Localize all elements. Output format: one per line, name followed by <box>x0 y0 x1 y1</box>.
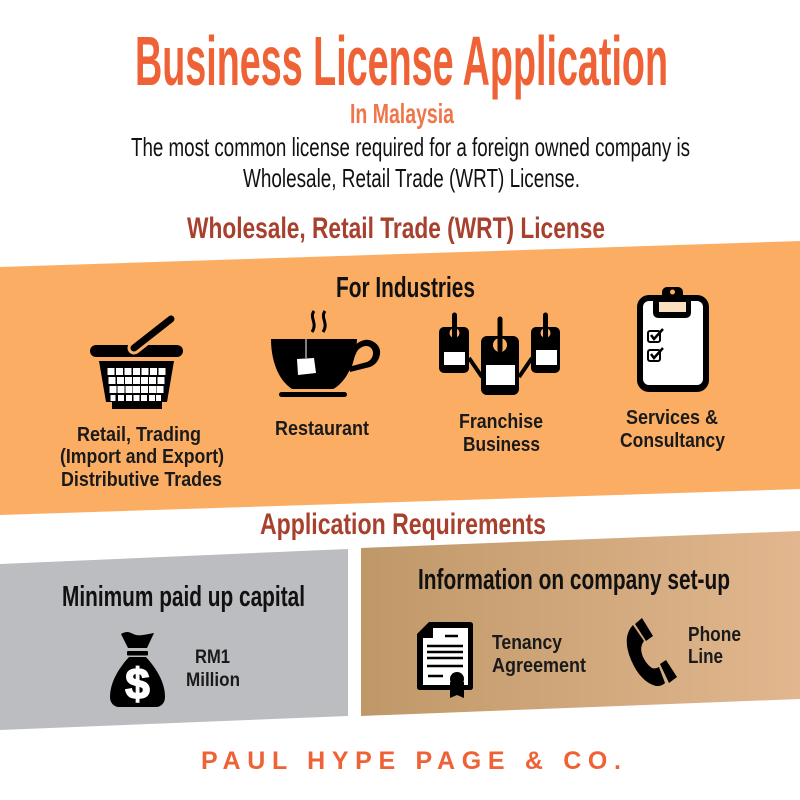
heading: minimum capital: Minimum paid up capital <box>62 581 305 613</box>
icon: shopping basket <box>90 319 183 409</box>
icon: clipboard <box>637 287 709 392</box>
icon: tea cup <box>271 311 380 397</box>
text: RM1 million <box>186 647 240 691</box>
icon: franchise tags <box>439 315 560 395</box>
intro text <box>131 132 690 193</box>
icon: tenancy document <box>417 622 473 698</box>
label: services <box>620 407 726 452</box>
label: retail: Retail, Trading <box>77 424 201 446</box>
panel: minimum capital <box>0 549 348 730</box>
label: services: Consultancy <box>620 430 726 452</box>
intro text: Wholesale, Retail Trade (WRT) License. <box>243 163 580 193</box>
panel: for industries <box>0 241 800 515</box>
label: tenancy <box>492 632 586 677</box>
label: retail: (Import and Export) <box>60 446 224 468</box>
icon: money bag <box>110 632 165 709</box>
label: restaurant: Restaurant <box>275 418 369 440</box>
text: RM1 million: Million <box>186 670 240 691</box>
icon: phone <box>627 618 677 686</box>
text: RM1 million: RM1 <box>195 647 230 668</box>
footer: firm name: PAUL HYPE PAGE & CO. <box>201 747 621 775</box>
label: franchise: Business <box>463 434 540 456</box>
label: phone line: Phone <box>688 624 741 646</box>
label: franchise: Franchise <box>459 411 543 433</box>
label: phone line <box>688 624 741 668</box>
label: retail: Distributive Trades <box>61 469 222 491</box>
heading: for industries: For Industries <box>336 272 475 304</box>
label: tenancy: Agreement <box>492 655 586 677</box>
label: franchise <box>459 411 543 456</box>
label: phone line: Line <box>688 646 723 668</box>
heading: application requirements: Application Requirements <box>260 508 546 541</box>
label: retail <box>60 424 224 491</box>
heading: WRT license: Wholesale, Retail Trade (WRT) License <box>187 212 605 245</box>
label: services: Services & <box>626 407 718 429</box>
subtitle: In Malaysia <box>350 98 454 129</box>
panel: company set-up <box>361 531 800 716</box>
label: tenancy: Tenancy <box>492 632 563 654</box>
icon: money bag: $ <box>125 660 150 709</box>
